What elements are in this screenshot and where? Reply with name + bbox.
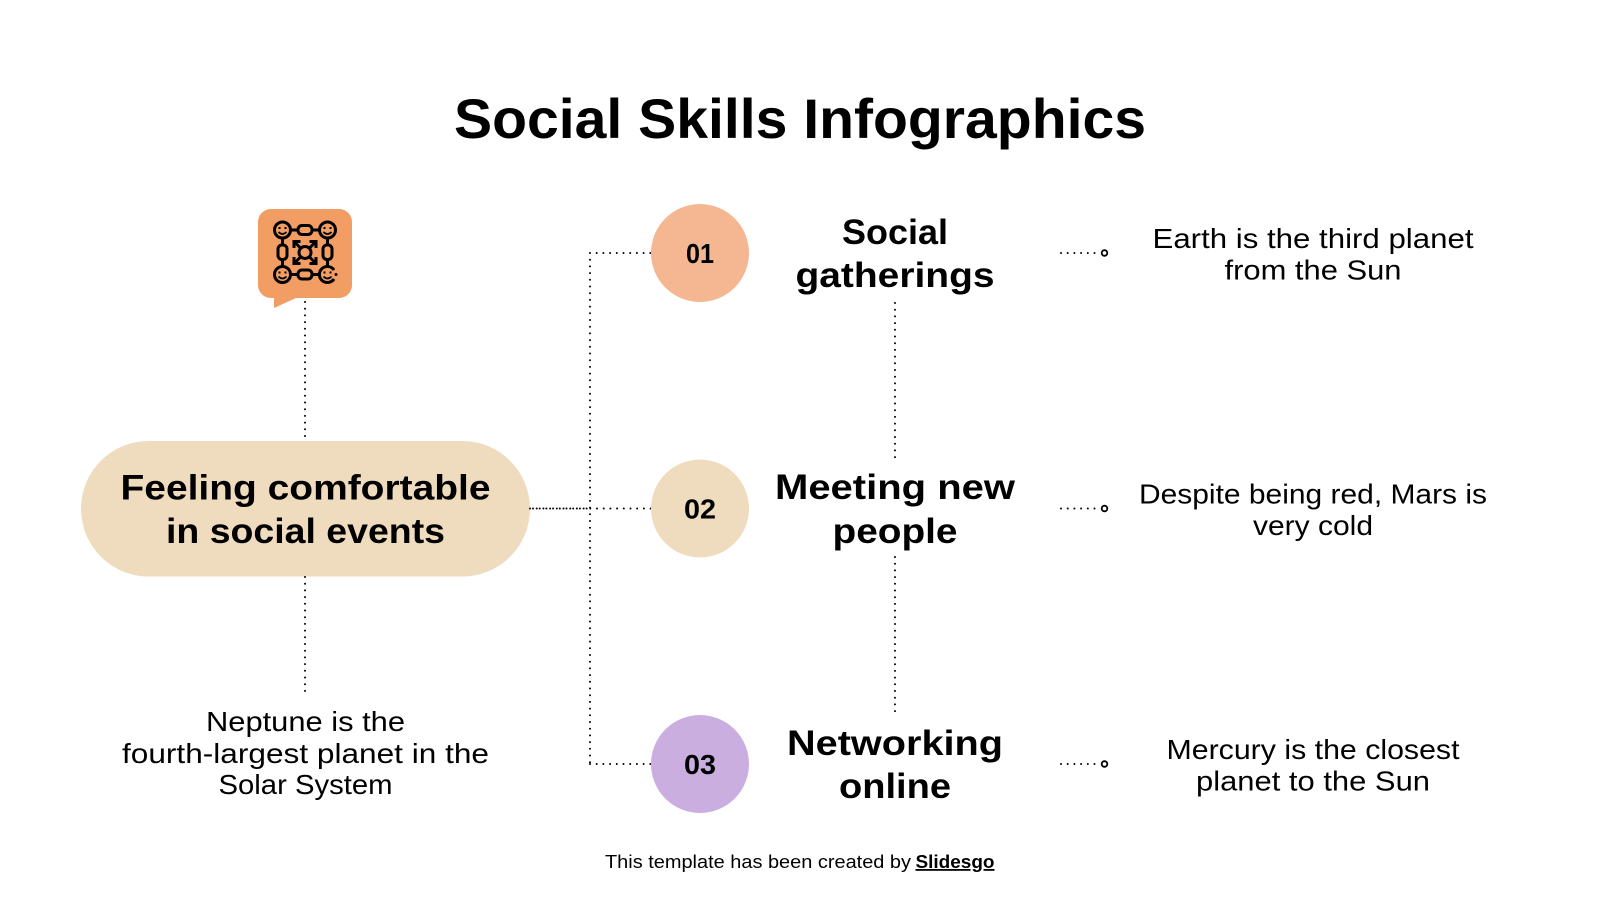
description 03 bbox=[1166, 734, 1460, 796]
panel: item 02 bbox=[651, 460, 1487, 558]
pill: main idea bbox=[81, 441, 530, 576]
text block: Neptune description: fourth-largest planet in the bbox=[122, 738, 489, 769]
connector to description 03 bbox=[1061, 761, 1107, 767]
icon: speech bubble with connected faces bbox=[258, 209, 352, 308]
description 03: planet to the Sun bbox=[1196, 766, 1430, 796]
text block: Neptune description bbox=[122, 706, 489, 800]
text block: Neptune description: Neptune is the bbox=[206, 706, 405, 737]
description 03: Mercury is the closest bbox=[1166, 734, 1460, 765]
heading: Networking online: Networking bbox=[787, 724, 1003, 763]
connector: 01 to 02 bbox=[894, 303, 896, 459]
description 01: from the Sun bbox=[1224, 254, 1402, 286]
heading: Networking online: online bbox=[839, 767, 951, 806]
description 01: Earth is the third planet bbox=[1152, 223, 1474, 254]
connector: icon to pill bbox=[304, 302, 306, 447]
panel: left column bbox=[81, 209, 530, 800]
heading: Meeting new people: people bbox=[832, 512, 958, 551]
heading: Meeting new people bbox=[775, 468, 1016, 551]
description 02: very cold bbox=[1253, 510, 1373, 541]
text block: Neptune description: Solar System bbox=[218, 769, 392, 800]
description 02: Despite being red, Mars is bbox=[1139, 478, 1487, 510]
title: Social Skills Infographics bbox=[454, 87, 1146, 150]
heading: Social gatherings: gatherings bbox=[796, 256, 994, 295]
heading: Meeting new people: Meeting new bbox=[775, 468, 1016, 507]
footer credit: This template has been created by bbox=[605, 852, 911, 872]
connector to description 02 bbox=[1061, 506, 1107, 511]
connector: 02 to 03 bbox=[894, 557, 896, 712]
connector: tree linking pill to the three items bbox=[530, 253, 652, 764]
number badge 02: 02 bbox=[684, 494, 716, 524]
number badge 03: 03 bbox=[684, 749, 716, 780]
description 02 bbox=[1139, 478, 1487, 541]
panel: item 03 bbox=[651, 715, 1460, 813]
connector to description 01 bbox=[1061, 250, 1107, 256]
description 01 bbox=[1152, 223, 1474, 286]
heading: Networking online bbox=[787, 724, 1003, 806]
footer credit: Slidesgo bbox=[916, 852, 995, 872]
heading: Social gatherings bbox=[796, 213, 994, 295]
number badge 02 bbox=[651, 460, 749, 558]
panel: item 01 bbox=[651, 204, 1474, 302]
number badge 03 bbox=[651, 715, 749, 813]
number badge 01: 01 bbox=[686, 238, 714, 269]
heading: Social gatherings: Social bbox=[842, 213, 948, 252]
connector: pill to description bbox=[304, 577, 306, 692]
number badge 01 bbox=[651, 204, 749, 302]
pill: main idea: in social events bbox=[166, 512, 445, 551]
pill: main idea: Feeling comfortable bbox=[120, 468, 490, 508]
